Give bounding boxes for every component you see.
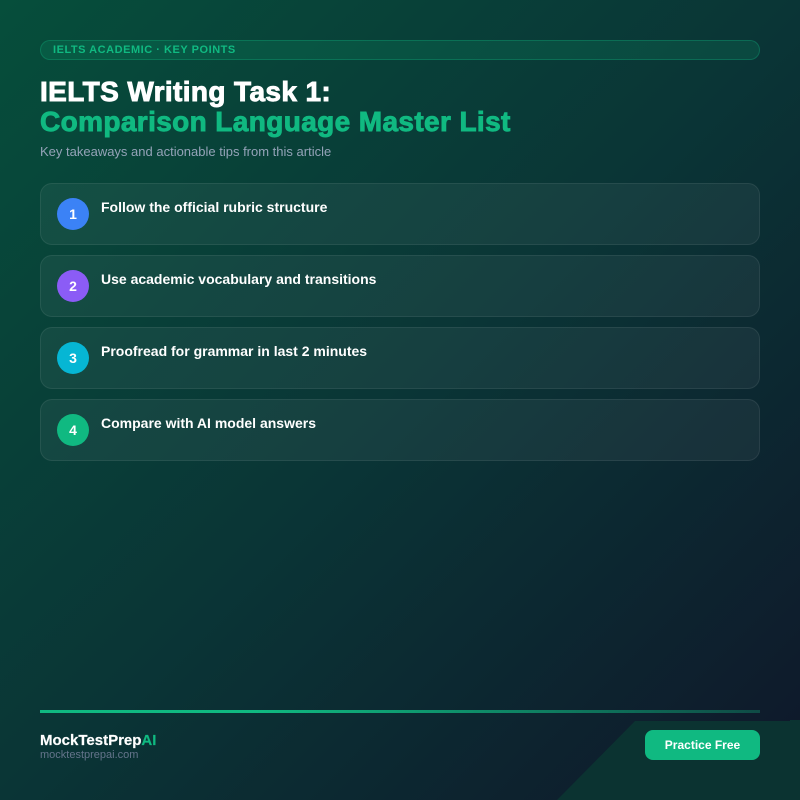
number badge 3: 3	[69, 350, 77, 366]
brand logo: MockTestPrepAI	[40, 732, 156, 749]
card: point 1	[40, 183, 760, 245]
point 3 text: Proofread for grammar in last 2 minutes	[101, 343, 367, 359]
footer accent line	[40, 710, 760, 713]
card: point 4	[40, 399, 760, 461]
number badge 4: 4	[69, 422, 77, 438]
number badge 3	[57, 342, 89, 374]
title: IELTS Writing Task 1:	[40, 76, 331, 107]
card: point 2	[40, 255, 760, 317]
number badge 2	[57, 270, 89, 302]
eyebrow badge: IELTS ACADEMIC · KEY POINTS	[53, 44, 236, 56]
number badge 4	[57, 414, 89, 446]
point 1 text: Follow the official rubric structure	[101, 199, 327, 215]
call to action button: Practice Free	[665, 738, 740, 752]
subtitle: Key takeaways and actionable tips from this article	[40, 144, 331, 159]
number badge 1: 1	[69, 206, 77, 222]
card: point 3	[40, 327, 760, 389]
number badge 2: 2	[69, 278, 77, 294]
number badge 1	[57, 198, 89, 230]
brand url: mocktestprepai.com	[40, 749, 138, 761]
title: Comparison Language Master List	[40, 106, 511, 137]
title	[40, 76, 511, 138]
point 2 text: Use academic vocabulary and transitions	[101, 271, 376, 287]
eyebrow badge	[40, 40, 760, 60]
call to action button	[645, 730, 760, 760]
point 4 text: Compare with AI model answers	[101, 415, 316, 431]
